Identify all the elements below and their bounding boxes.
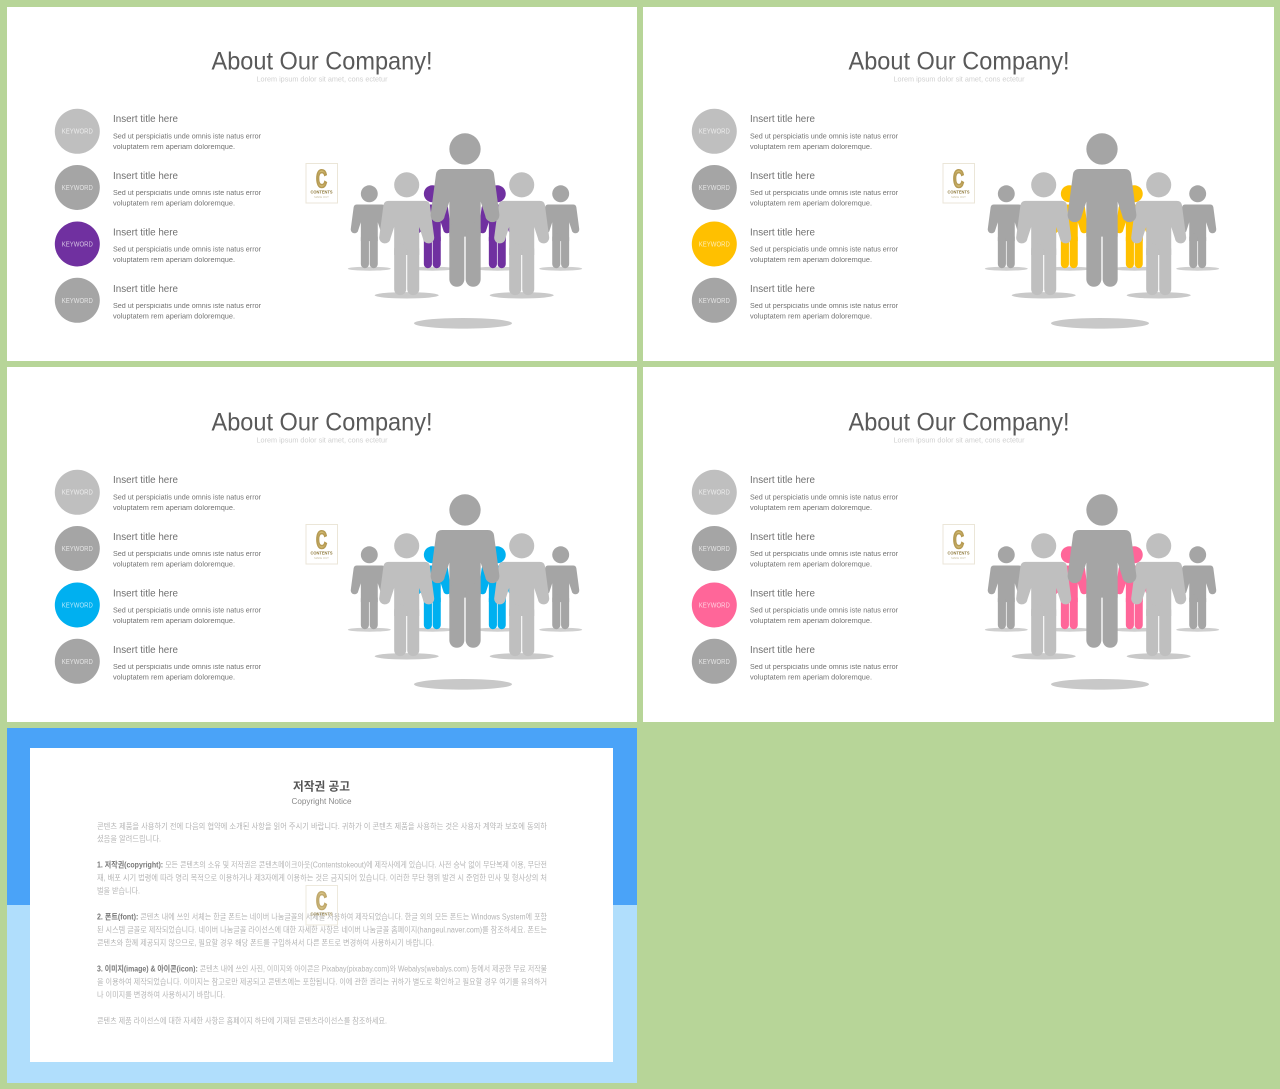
title: About Our Company! <box>212 48 432 76</box>
list item 4 <box>55 639 262 684</box>
list item 2: KEYWORD <box>699 185 730 192</box>
list item 4: Sed ut perspiciatis unde omnis iste natus error <box>750 664 899 671</box>
list item 1 <box>55 470 262 515</box>
list item 4: Sed ut perspiciatis unde omnis iste natus error <box>113 664 262 671</box>
copyright subheading: Copyright Notice <box>292 797 352 806</box>
copyright body text: 콘텐츠와 함께 제공되지 않으므로, 필요할 경우 해당 폰트를 구입하셔서 다른 폰트로 변경하여 사용하시기 바랍니다. <box>97 938 434 948</box>
list item 4: voluptatem rem aperiam doloremque. <box>750 314 872 320</box>
list item 1 <box>692 470 899 515</box>
list item 4: KEYWORD <box>62 298 93 305</box>
list item 1: Sed ut perspiciatis unde omnis iste natus error <box>750 494 899 502</box>
copyright body text: 3. 이미지(image) & 아이콘(icon): 콘텐츠 내에 쓰인 사진, 이미지와 아이콘은 Pixabay(pixabay.com)와 Webalys(webalys.com) 등에서 제공한 무료 저작물 <box>97 964 547 974</box>
panel: yellow slide <box>643 7 1274 361</box>
copyright body text: 콘텐츠 제품을 사용하기 전에 다음의 협약에 소개된 사항을 읽어 주시기 바랍니다. 귀하가 이 콘텐츠 제품을 사용하는 것은 사용자 계약과 보호에 동의하 <box>97 821 548 831</box>
list item 2: Insert title here <box>113 171 178 182</box>
list item 4: Insert title here <box>113 645 178 656</box>
list item 2 <box>692 165 899 210</box>
list item 2 <box>55 526 262 571</box>
logo watermark <box>306 886 338 925</box>
list item 1: KEYWORD <box>699 490 730 496</box>
copyright body text: 2. 폰트(font): 콘텐츠 내에 쓰인 서체는 한글 폰트는 네이버 나눔글꼴의 서체를 사용하여 제작되었습니다. 한글 외의 모든 폰트는 Windows System에 포함 <box>97 912 548 922</box>
list item 2: Sed ut perspiciatis unde omnis iste natus error <box>750 551 899 558</box>
copyright body text: 벌을 받습니다. <box>97 886 140 896</box>
list item 2: Insert title here <box>113 532 178 543</box>
panel: blue slide <box>7 367 637 722</box>
people group <box>985 133 1219 329</box>
list item 2 <box>55 165 262 210</box>
subtitle: Lorem ipsum dolor sit amet, cons ectetur <box>256 438 388 444</box>
list item 3 <box>55 222 262 266</box>
list item 3: Sed ut perspiciatis unde omnis iste natus error <box>113 246 262 254</box>
list item 4: Insert title here <box>750 645 815 656</box>
list item 4: KEYWORD <box>699 659 730 666</box>
list item 1: Sed ut perspiciatis unde omnis iste natus error <box>750 134 899 140</box>
title: About Our Company! <box>848 408 1070 436</box>
list item 1: KEYWORD <box>62 128 93 136</box>
list item 1: KEYWORD <box>62 490 93 496</box>
list item 3: KEYWORD <box>699 242 730 248</box>
list item 2: voluptatem rem aperiam doloremque. <box>750 200 872 208</box>
logo <box>943 524 974 564</box>
list item 4: voluptatem rem aperiam doloremque. <box>113 674 235 682</box>
people group <box>348 133 582 329</box>
list item 2: Sed ut perspiciatis unde omnis iste natus error <box>113 190 262 197</box>
logo <box>943 164 974 203</box>
list item 1: Insert title here <box>750 475 815 486</box>
copyright body text: 을 이용하여 제작되었습니다. 이미지는 참고로만 제공되고 콘텐츠에는 포함됩니다. 이에 관한 권리는 귀하가 별도로 확인하고 필요할 경우 여기를 유의하거 <box>97 976 547 986</box>
list item 2: voluptatem rem aperiam doloremque. <box>113 200 235 208</box>
list item 2: KEYWORD <box>62 185 93 192</box>
list item 4: KEYWORD <box>699 298 730 305</box>
subtitle: Lorem ipsum dolor sit amet, cons ectetur <box>894 438 1025 444</box>
list item 1: voluptatem rem aperiam doloremque. <box>113 505 235 512</box>
list item 4 <box>692 639 899 684</box>
list item 2: KEYWORD <box>62 546 93 553</box>
list item 2: Sed ut perspiciatis unde omnis iste natus error <box>750 190 899 197</box>
list item 3 <box>692 222 899 266</box>
list item 2: KEYWORD <box>699 546 730 553</box>
list item 3 <box>55 582 262 628</box>
list item 1 <box>692 109 899 154</box>
list item 3: voluptatem rem aperiam doloremque. <box>750 257 872 264</box>
people group <box>985 494 1219 690</box>
copyright heading: 저작권 공고 <box>293 778 350 794</box>
list item 1: Insert title here <box>113 114 178 125</box>
list item 3: voluptatem rem aperiam doloremque. <box>113 618 235 625</box>
list item 4: Sed ut perspiciatis unde omnis iste natus error <box>750 303 899 310</box>
logo <box>306 524 338 564</box>
list item 3 <box>692 582 899 628</box>
list item 3: Insert title here <box>750 588 815 600</box>
list item 1: voluptatem rem aperiam doloremque. <box>113 144 235 151</box>
list item 1: voluptatem rem aperiam doloremque. <box>750 144 872 151</box>
logo <box>306 164 338 203</box>
list item 4 <box>55 278 262 323</box>
logo watermark: C <box>316 888 327 916</box>
copyright body text: 나 이미지를 변경하여 사용하시기 바랍니다. <box>97 990 225 1000</box>
panel: pink slide <box>643 367 1274 722</box>
copyright body text: 셨음을 알려드립니다. <box>97 834 161 844</box>
list item 3: KEYWORD <box>62 242 93 248</box>
list item 4: Insert title here <box>113 284 178 295</box>
list item 1: Insert title here <box>113 475 178 486</box>
copyright body text: 1. 저작권(copyright): 모든 콘텐츠의 소유 및 저작권은 콘텐츠메이크아웃(Contentstokeout)에 제작사에게 있습니다. 사전 승낙 없이 무단복제 이용, 무단전 <box>97 860 547 870</box>
list item 2: Insert title here <box>750 171 815 182</box>
list item 3: Sed ut perspiciatis unde omnis iste natus error <box>750 246 899 254</box>
subtitle: Lorem ipsum dolor sit amet, cons ectetur <box>256 76 388 84</box>
list item 2: voluptatem rem aperiam doloremque. <box>113 562 235 568</box>
copyright body text: 재, 배포 시기 법령에 따라 영리 목적으로 이용하거나 제3자에게 이용하는 것은 금지되어 있습니다. 이러한 무단 행위 발견 시 준엄한 민사 및 형사상의 처 <box>97 872 547 882</box>
list item 3: voluptatem rem aperiam doloremque. <box>113 257 235 264</box>
list item 2: Sed ut perspiciatis unde omnis iste natus error <box>113 551 262 558</box>
list item 2: voluptatem rem aperiam doloremque. <box>750 562 872 568</box>
title: About Our Company! <box>848 48 1070 76</box>
list item 1: Sed ut perspiciatis unde omnis iste natus error <box>113 494 262 502</box>
list item 1: KEYWORD <box>699 128 730 136</box>
list item 3: KEYWORD <box>699 602 730 610</box>
people group <box>348 494 582 690</box>
list item 3: Sed ut perspiciatis unde omnis iste natus error <box>750 608 899 614</box>
list item 4: voluptatem rem aperiam doloremque. <box>750 674 872 682</box>
title: About Our Company! <box>212 408 432 436</box>
panel: copyright notice <box>7 728 637 1083</box>
list item 2 <box>692 526 899 571</box>
logo watermark: CONTENTS <box>310 912 332 916</box>
list item 3: Insert title here <box>113 588 178 600</box>
list item 1: Sed ut perspiciatis unde omnis iste natus error <box>113 134 262 140</box>
copyright body text: 된 시스템 글꼴로 제작되었습니다. 네이버 나눔글꼴 라이선스에 대한 자세한 사항은 네이버 나눔글꼴 홈페이지(hangeul.naver.com)를 참조하세요. 폰트는 <box>97 924 547 934</box>
list item 4 <box>692 278 899 323</box>
list item 1: voluptatem rem aperiam doloremque. <box>750 505 872 512</box>
list item 3: Insert title here <box>750 228 815 238</box>
list item 3: voluptatem rem aperiam doloremque. <box>750 618 872 625</box>
list item 4: KEYWORD <box>62 659 93 666</box>
copyright body text <box>97 821 548 1026</box>
list item 4: Insert title here <box>750 284 815 295</box>
list item 3: Sed ut perspiciatis unde omnis iste natus error <box>113 608 262 614</box>
list item 2: Insert title here <box>750 532 815 543</box>
list item 1: Insert title here <box>750 114 815 125</box>
copyright body text: 콘텐츠 제품 라이선스에 대한 자세한 사항은 홈페이지 하단에 기재된 콘텐츠라이선스를 참조하세요. <box>97 1016 387 1026</box>
list item 3: KEYWORD <box>62 602 93 610</box>
subtitle: Lorem ipsum dolor sit amet, cons ectetur <box>894 76 1025 84</box>
panel: purple slide <box>7 7 637 361</box>
list item 1 <box>55 109 262 154</box>
list item 4: Sed ut perspiciatis unde omnis iste natus error <box>113 303 262 310</box>
list item 3: Insert title here <box>113 228 178 238</box>
list item 4: voluptatem rem aperiam doloremque. <box>113 314 235 320</box>
